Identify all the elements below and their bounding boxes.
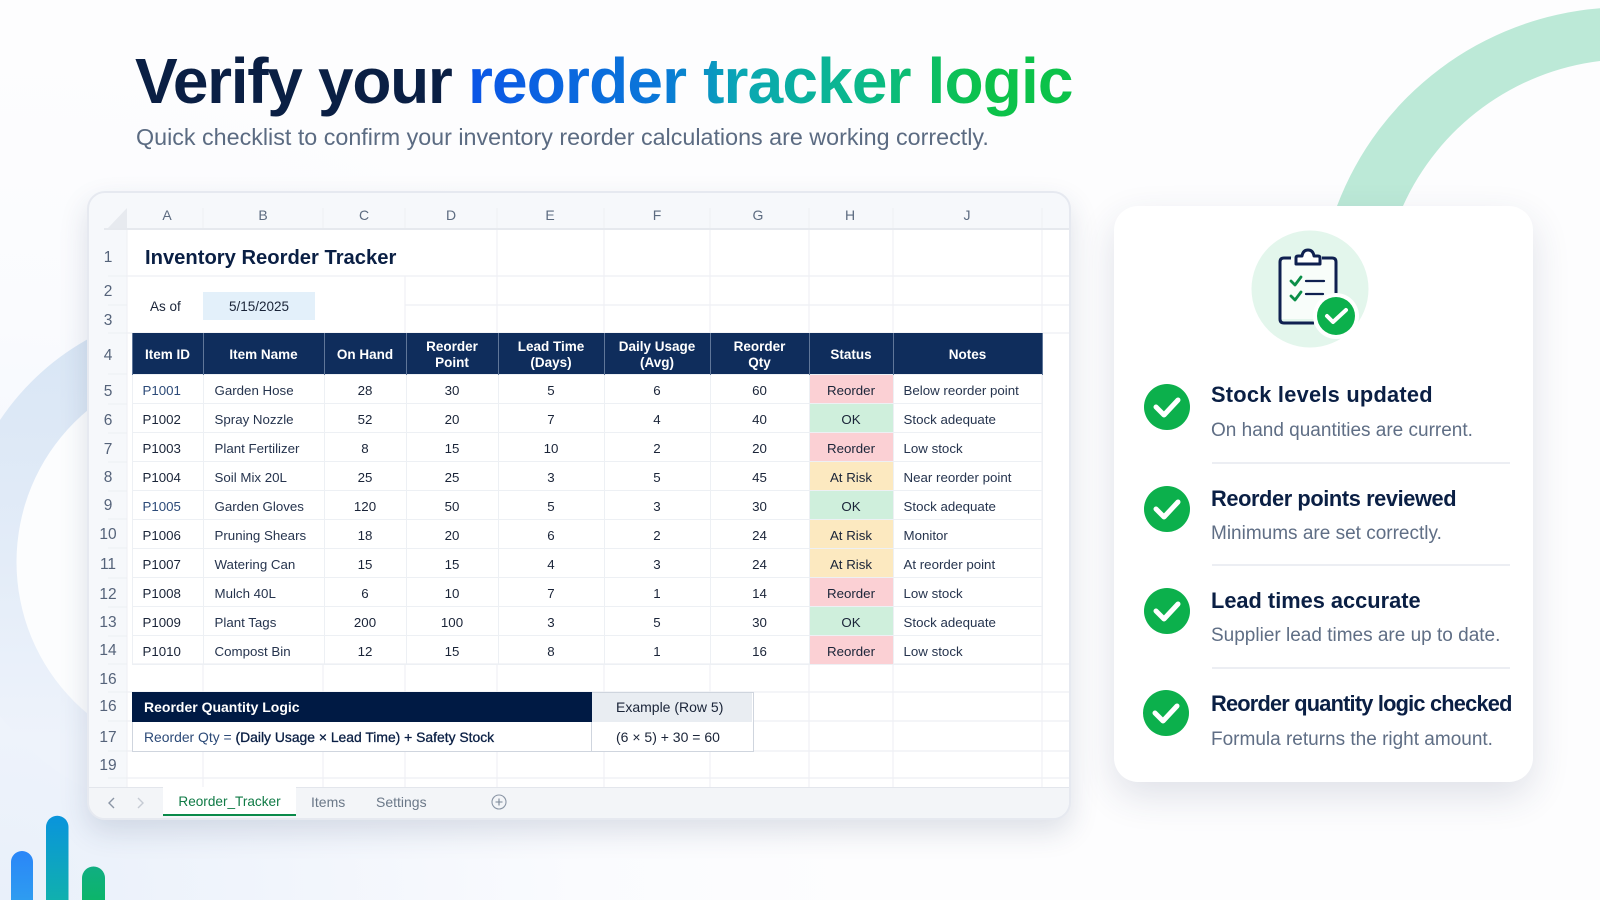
row P1004: At Risk: [830, 470, 872, 484]
row P1007: 15: [358, 556, 372, 572]
logic formula: [132, 722, 592, 751]
row number 6: 6: [104, 412, 112, 429]
table header row: Qty: [748, 355, 771, 370]
row P1004: [142, 462, 1012, 490]
row P1001: Below reorder point: [904, 382, 1019, 398]
table header row: Item Name: [229, 347, 298, 362]
tab scroll chevrons: [108, 798, 144, 808]
column header C: C: [359, 207, 369, 223]
row number 4: 4: [104, 347, 112, 364]
logic heading: [132, 692, 592, 722]
row P1010: 12: [358, 644, 372, 658]
decorative bar chart: [11, 816, 105, 900]
row P1005: P1005: [142, 498, 181, 514]
row P1004: 45: [752, 470, 767, 484]
row P1006: 18: [358, 528, 372, 542]
row P1002: 7: [547, 412, 555, 426]
panel: checklist card: [1114, 206, 1533, 782]
row P1003: 20: [752, 440, 767, 456]
column header B: B: [258, 207, 268, 223]
row P1006: 20: [445, 528, 459, 542]
row P1009: 5: [653, 614, 661, 630]
row P1003: Reorder: [827, 440, 875, 456]
row P1007: At reorder point: [904, 556, 995, 572]
row P1004: Near reorder point: [904, 470, 1011, 484]
row number 10: 10: [99, 526, 117, 543]
row P1002: 4: [653, 412, 661, 426]
row P1010: 1: [653, 644, 661, 658]
row P1003: 10: [544, 440, 558, 456]
table header row: On Hand: [337, 347, 393, 362]
row number 1: 1: [104, 249, 112, 266]
row P1004: 3: [547, 470, 555, 484]
row P1004: Soil Mix 20L: [214, 470, 287, 484]
row number 2: 2: [104, 283, 112, 300]
row P1006: 6: [547, 528, 555, 542]
row P1007: 24: [752, 556, 767, 572]
logic heading: Reorder Quantity Logic: [144, 699, 300, 715]
table header row: Daily Usage: [619, 339, 695, 354]
row P1005: 120: [354, 498, 376, 514]
logic formula: Reorder Qty = (Daily Usage × Lead Time) + Safety Stock: [144, 729, 494, 745]
row number 17: 17: [99, 729, 117, 746]
table header row: Lead Time: [518, 339, 584, 354]
row P1006: [142, 520, 948, 548]
row P1003: P1003: [142, 440, 181, 456]
column header F: F: [653, 207, 661, 223]
row P1008: 1: [653, 586, 661, 600]
row P1002: [142, 404, 996, 432]
row P1009: 200: [354, 614, 376, 630]
row P1005: [142, 491, 996, 519]
active tab: Reorder_Tracker: [178, 794, 281, 809]
row P1007: 4: [547, 556, 555, 572]
row P1009: Plant Tags: [214, 614, 276, 630]
row P1010: 15: [445, 644, 459, 658]
row P1002: Stock adequate: [904, 412, 996, 426]
row P1009: [142, 607, 996, 635]
checklist item 3 title: Lead times accurate: [1211, 588, 1421, 613]
add sheet icon: [492, 794, 506, 810]
row number 9: 9: [104, 497, 112, 514]
subtitle: Quick checklist to confirm your inventory reorder calculations are working correctly.: [136, 124, 989, 150]
row P1009: P1009: [142, 614, 181, 630]
row P1002: 20: [445, 412, 459, 426]
row number 19: 19: [99, 757, 117, 774]
row number 14: 14: [99, 642, 117, 659]
row P1001: Garden Hose: [214, 382, 294, 398]
icon: clipboard with check: [1252, 230, 1368, 348]
row P1009: 3: [547, 614, 555, 630]
row P1007: P1007: [142, 556, 181, 572]
settings tab: Settings: [376, 794, 427, 810]
row number 16: 16: [99, 671, 117, 688]
row P1002: 40: [752, 412, 767, 426]
row P1006: P1006: [142, 528, 181, 542]
row P1010: P1010: [142, 644, 181, 658]
row P1007: [142, 549, 996, 577]
row P1005: Garden Gloves: [214, 498, 304, 514]
row P1004: 25: [358, 470, 372, 484]
panel: spreadsheet window: [87, 191, 1071, 820]
row P1010: [142, 636, 963, 664]
row P1008: Reorder: [827, 586, 875, 600]
column header H: H: [845, 207, 855, 223]
divider 2: [1212, 564, 1510, 566]
table header row: [133, 333, 1042, 664]
row P1007: At Risk: [830, 556, 872, 572]
row number 3: 3: [104, 312, 112, 329]
row P1010: Compost Bin: [214, 644, 291, 658]
row P1008: 6: [361, 586, 369, 600]
checklist item 4 title: Reorder quantity logic checked: [1211, 691, 1512, 716]
row P1001: 30: [445, 382, 459, 398]
row number 11: 11: [100, 556, 116, 573]
row number 12: 12: [99, 586, 117, 603]
row P1007: 3: [653, 556, 661, 572]
row P1008: [142, 578, 963, 606]
items tab: Items: [311, 794, 345, 810]
table header row: Item ID: [145, 347, 190, 362]
row P1010: Low stock: [904, 644, 963, 658]
row P1006: At Risk: [830, 528, 872, 542]
icon: check 3: [1144, 588, 1190, 634]
reorder quantity logic box: [132, 692, 754, 752]
column header D: D: [446, 207, 456, 223]
sheet heading: Inventory Reorder Tracker: [145, 247, 396, 269]
row P1004: 25: [445, 470, 459, 484]
checklist item 2 title: Reorder points reviewed: [1211, 486, 1456, 511]
date cell: [203, 292, 315, 320]
column header A: A: [162, 207, 172, 223]
checklist item 1 title: Stock levels updated: [1211, 382, 1433, 407]
row number 13: 13: [99, 614, 117, 631]
row P1001: Reorder: [827, 382, 875, 398]
tab bar: [89, 787, 1073, 820]
example heading: Example (Row 5): [616, 699, 723, 715]
row P1010: 8: [547, 644, 555, 658]
row P1003: Plant Fertilizer: [214, 440, 299, 456]
row P1007: Watering Can: [214, 556, 295, 572]
row P1002: Spray Nozzle: [214, 412, 294, 426]
row P1001: [142, 375, 1019, 403]
icon: check 4: [1143, 690, 1189, 736]
row P1009: Stock adequate: [904, 614, 996, 630]
as-of label: As of: [150, 299, 181, 314]
row P1001: 5: [547, 382, 555, 398]
icon: check 1: [1144, 384, 1190, 430]
row P1005: 50: [445, 498, 459, 514]
checklist item 4 description: Formula returns the right amount.: [1211, 729, 1493, 750]
row P1007: 15: [445, 556, 459, 572]
row P1010: Reorder: [827, 644, 875, 658]
row P1008: 14: [752, 586, 767, 600]
table header row: Notes: [949, 347, 986, 362]
active tab: [163, 787, 296, 816]
row P1008: P1008: [142, 586, 181, 600]
row P1008: Low stock: [904, 586, 963, 600]
row P1006: Monitor: [904, 528, 948, 542]
table header row: (Days): [530, 355, 572, 370]
column header G: G: [753, 207, 763, 223]
row number 16 second: 16: [99, 698, 117, 715]
column header E: E: [545, 207, 555, 223]
row P1005: OK: [841, 498, 861, 514]
row P1001: 28: [358, 382, 372, 398]
row P1009: 30: [752, 614, 767, 630]
row number 7: 7: [104, 441, 112, 458]
checklist item 3 description: Supplier lead times are up to date.: [1211, 625, 1500, 646]
row P1010: 16: [752, 644, 767, 658]
divider 1: [1212, 462, 1510, 464]
date cell: 5/15/2025: [229, 299, 289, 314]
example heading: [592, 693, 752, 722]
row P1001: 6: [653, 382, 661, 398]
column header J: J: [964, 207, 970, 223]
checklist item 2 description: Minimums are set correctly.: [1211, 523, 1442, 544]
row P1001: 60: [752, 382, 767, 398]
divider 3: [1212, 667, 1510, 668]
table header row: (Avg): [640, 355, 674, 370]
row P1002: OK: [841, 412, 861, 426]
sheet grid area: [104, 208, 1069, 787]
row P1003: 2: [653, 440, 661, 456]
row P1002: P1002: [142, 412, 181, 426]
row P1003: [142, 433, 963, 461]
row P1003: 15: [445, 440, 459, 456]
checklist item 1 description: On hand quantities are current.: [1211, 420, 1473, 441]
inventory table: [132, 333, 1043, 665]
example calculation: (6 × 5) + 30 = 60: [616, 729, 720, 745]
row P1005: 3: [653, 498, 661, 514]
row P1001: P1001: [142, 382, 181, 398]
row P1008: Mulch 40L: [214, 586, 276, 600]
table header row: Reorder: [426, 339, 478, 354]
row P1008: 10: [445, 586, 459, 600]
row P1004: 5: [653, 470, 661, 484]
table header row: Reorder: [734, 339, 785, 354]
row P1003: Low stock: [904, 440, 963, 456]
row P1009: 100: [441, 614, 463, 630]
row number 8: 8: [104, 469, 112, 486]
icon: check 2: [1144, 486, 1190, 532]
table header row: Point: [435, 355, 469, 370]
row number 5: 5: [104, 383, 112, 400]
row P1003: 8: [361, 440, 369, 456]
row P1006: 24: [752, 528, 767, 542]
row P1002: 52: [358, 412, 372, 426]
row P1006: Pruning Shears: [214, 528, 306, 542]
row P1005: 30: [752, 498, 767, 514]
row P1008: 7: [547, 586, 555, 600]
row P1004: P1004: [142, 470, 181, 484]
row P1005: Stock adequate: [904, 498, 996, 514]
row P1009: OK: [841, 614, 861, 630]
row P1005: 5: [547, 498, 555, 514]
row P1006: 2: [653, 528, 661, 542]
table header row: Status: [830, 347, 872, 362]
title: Verify your reorder tracker logic: [135, 45, 1073, 117]
